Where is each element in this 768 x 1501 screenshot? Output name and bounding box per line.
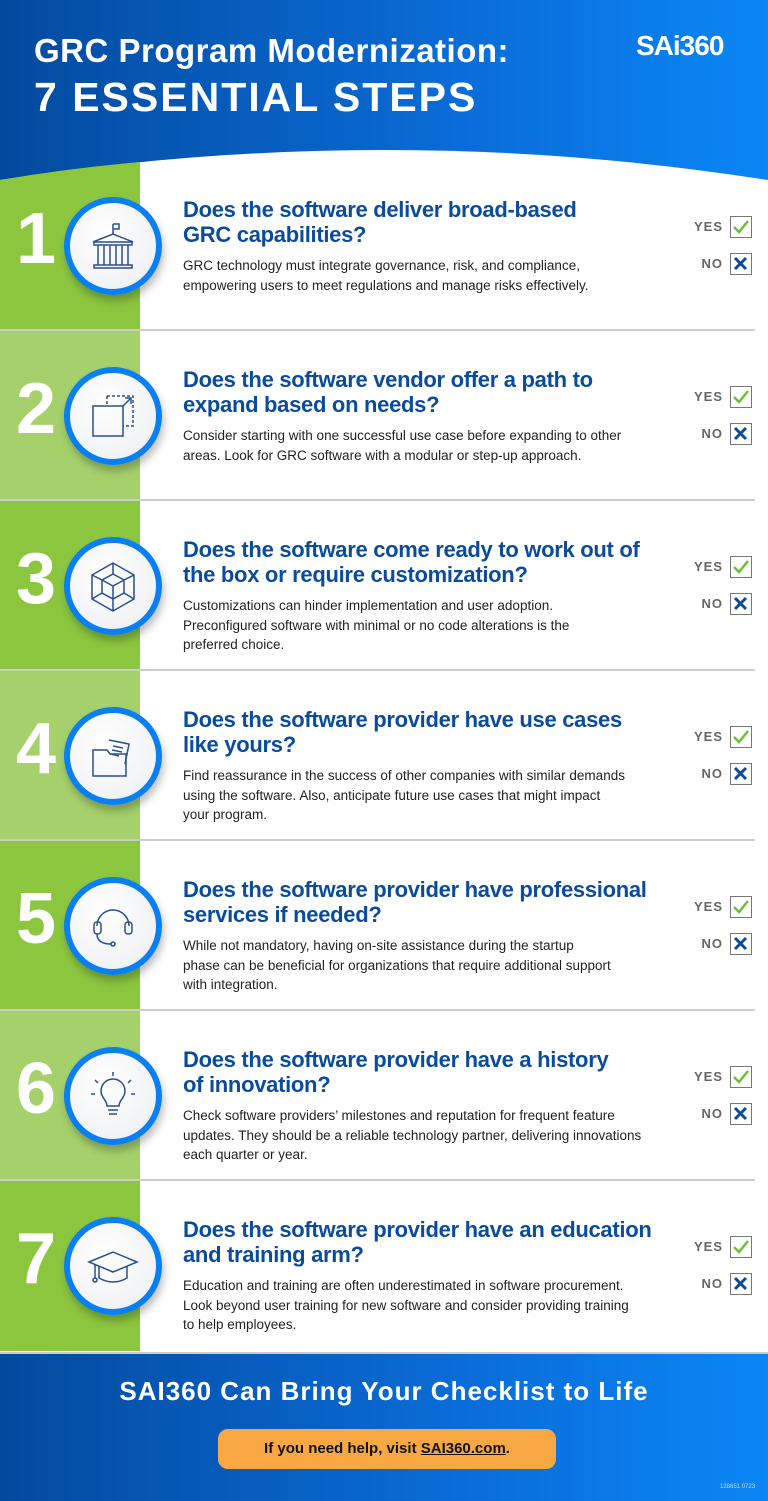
number 4: 4 (16, 709, 56, 789)
checkbox yes (694, 1066, 752, 1088)
number 1: 1 (16, 199, 56, 279)
header curve (0, 150, 768, 181)
checkbox no: NO (702, 936, 723, 951)
checkbox no (702, 1103, 752, 1125)
title (183, 1047, 609, 1097)
text: GRC technology must integrate governance, risk, and compliance, (183, 258, 580, 273)
checkbox no: NO (702, 426, 723, 441)
footer heading: SAI360 Can Bring Your Checklist to Life (119, 1376, 649, 1406)
text: Preconfigured software with minimal or no code alterations is the (183, 618, 569, 632)
number 3: 3 (16, 539, 56, 619)
number 6: 6 (16, 1049, 56, 1129)
text: Consider starting with one successful use case before expanding to other (183, 428, 621, 443)
icon: lightbulb (64, 1047, 162, 1145)
checkbox yes: YES (694, 219, 723, 234)
text: each quarter or year. (183, 1147, 308, 1162)
row 1 (0, 190, 755, 331)
row 3 (0, 501, 768, 671)
icon: building (64, 197, 162, 295)
title: like yours? (183, 732, 296, 757)
text: Education and training are often underestimated in software procurement. (183, 1278, 624, 1293)
title: Does the software deliver broad-based (183, 197, 577, 222)
row 4 (0, 671, 768, 841)
text: with integration. (183, 977, 278, 992)
text (183, 598, 569, 652)
header background (0, 0, 768, 185)
text: to help employees. (183, 1317, 296, 1332)
row 2 (0, 331, 768, 501)
text: phase can be beneficial for organizations that require additional support (183, 958, 611, 972)
checkbox no: NO (702, 766, 723, 781)
title: Does the software provider have a history (183, 1047, 608, 1072)
number 2: 2 (16, 369, 56, 449)
row 5 (0, 841, 768, 1011)
icon: expand (64, 367, 162, 465)
text: areas. Look for GRC software with a modular or step-up approach. (183, 448, 581, 462)
title (183, 877, 647, 927)
logo: SAi360 (636, 30, 723, 61)
text (183, 258, 588, 293)
title (183, 707, 622, 757)
icon: graduation cap (64, 1217, 162, 1315)
checkbox no: NO (702, 256, 723, 271)
text: using the software. Also, anticipate future use cases that might impact (183, 788, 600, 802)
checkbox yes (694, 386, 752, 408)
text: updates. They should be a reliable technology partner, delivering innovations (183, 1128, 641, 1142)
checkbox yes (694, 556, 752, 578)
text: empowering users to meet regulations and manage risks effectively. (183, 278, 588, 292)
text (183, 938, 611, 992)
text (183, 1108, 641, 1162)
text: your program. (183, 807, 267, 822)
text (183, 768, 625, 822)
icon: folder (64, 707, 162, 805)
text: Look beyond user training for new software and consider providing training (183, 1298, 629, 1312)
title: expand based on needs? (183, 392, 439, 417)
text: Check software providers’ milestones and reputation for frequent feature (183, 1108, 615, 1123)
title: and training arm? (183, 1242, 364, 1267)
checkbox yes: YES (694, 1239, 723, 1254)
checkbox no (702, 593, 752, 615)
title (34, 32, 509, 120)
text: preferred choice. (183, 637, 284, 652)
title (183, 197, 577, 247)
title (183, 367, 593, 417)
checkbox yes: YES (694, 1069, 723, 1084)
title: the box or require customization? (183, 562, 528, 587)
icon: cube (64, 537, 162, 635)
title: 7 ESSENTIAL STEPS (34, 74, 477, 120)
checkbox no (702, 763, 752, 785)
checkbox yes: YES (694, 389, 723, 404)
row 7 (0, 1181, 768, 1351)
title: of innovation? (183, 1072, 330, 1097)
text (183, 428, 622, 463)
number 7: 7 (16, 1219, 56, 1299)
icon: headset (64, 877, 162, 975)
text: While not mandatory, having on-site assistance during the startup (183, 938, 574, 953)
checkbox yes (694, 216, 752, 238)
title: Does the software come ready to work out of (183, 537, 640, 562)
title: Does the software provider have an education (183, 1217, 651, 1242)
checkbox no: NO (702, 1276, 723, 1291)
checkbox yes: YES (694, 559, 723, 574)
number 5: 5 (16, 879, 56, 959)
checkbox no (702, 933, 752, 955)
row 6 (0, 1011, 768, 1181)
title: GRC capabilities? (183, 222, 366, 247)
title: Does the software provider have use cases (183, 707, 622, 732)
footer (0, 1352, 768, 1501)
checkbox no (702, 1273, 752, 1295)
checkbox yes: YES (694, 899, 723, 914)
checkbox no (702, 253, 752, 275)
text: Find reassurance in the success of other companies with similar demands (183, 768, 625, 783)
title: GRC Program Modernization: (34, 32, 509, 69)
checkbox no (702, 423, 752, 445)
CTA button (218, 1429, 556, 1469)
title: Does the software vendor offer a path to (183, 367, 593, 392)
checkbox yes: YES (694, 729, 723, 744)
checkbox yes (694, 726, 752, 748)
text (183, 1278, 629, 1332)
text: Customizations can hinder implementation and user adoption. (183, 598, 553, 613)
checkbox no: NO (702, 1106, 723, 1121)
checkbox yes (694, 1236, 752, 1258)
CTA button: If you need help, visit SAI360.com. (264, 1440, 510, 1457)
title: Does the software provider have professional (183, 877, 647, 902)
checkbox yes (694, 896, 752, 918)
code: 128651 0723 (720, 1484, 755, 1490)
title (183, 1217, 651, 1267)
title: services if needed? (183, 902, 382, 927)
title (183, 537, 640, 587)
checkbox no: NO (702, 596, 723, 611)
